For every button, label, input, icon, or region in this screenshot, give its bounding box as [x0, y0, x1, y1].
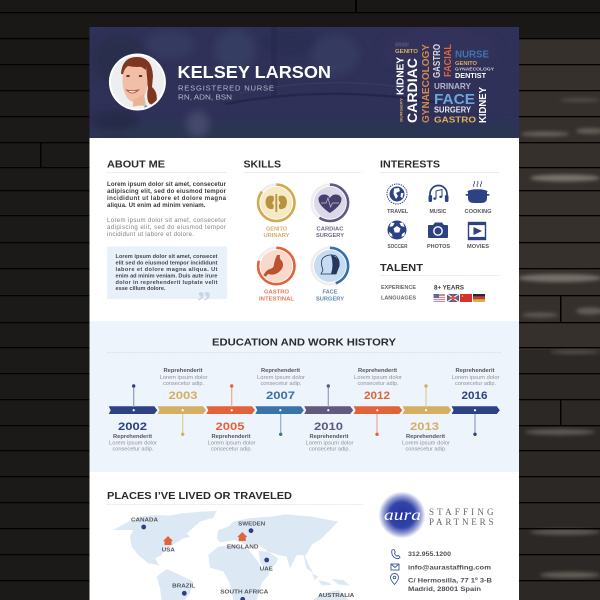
word cloud: GASTRO	[434, 114, 476, 124]
milestone: 2007: Lorem ipsum dolor	[257, 375, 305, 381]
panel: skills	[244, 160, 362, 302]
skill: gastro intestinal: GASTRO	[264, 290, 289, 296]
word cloud: URINARY	[395, 42, 409, 48]
word cloud: SURGERY	[434, 106, 472, 114]
milestone: 2012	[354, 368, 402, 436]
word cloud: KIDNEY	[396, 57, 406, 95]
icon: music: MUSIC	[430, 209, 447, 215]
bold paragraph: Lorem ipsum dolor sit amet, consecetur	[107, 181, 227, 188]
bold paragraph	[107, 181, 227, 209]
regular paragraph: incididunt ut labore et dolore.	[107, 231, 194, 238]
milestone: 2002: Reprehenderit	[113, 434, 152, 440]
skill: genito urinary: GENITO	[266, 226, 287, 232]
milestone: 2013: Reprehenderit	[406, 434, 445, 440]
milestone: 2002	[109, 384, 157, 452]
word cloud: FACIAL	[443, 44, 454, 77]
milestone: 2007	[257, 368, 305, 436]
milestone: 2003: Lorem ipsum dolor	[160, 375, 208, 381]
email address: info@aurastaffing.com	[408, 564, 491, 571]
milestone: 2002: consecetur adip.	[112, 446, 154, 452]
heading: about me: ABOUT ME	[107, 160, 165, 170]
quote callout: esse cillum dolore.	[116, 286, 166, 292]
heading: talent: TALENT	[380, 263, 424, 274]
milestone: 2012: 2012	[364, 390, 390, 402]
word cloud: GYNAECOLOGY	[455, 67, 494, 72]
icon: phone	[392, 550, 400, 559]
quote callout: Lorem ipsum dolor sit amet, consecet	[116, 254, 218, 260]
experience row	[381, 285, 464, 292]
address	[408, 578, 492, 593]
skill: cardiac surgery: SURGERY	[316, 233, 344, 239]
milestone: 2016	[452, 368, 500, 436]
word cloud: NURSE	[455, 48, 489, 60]
logo: aura staffing partners: PARTNERS	[429, 517, 494, 527]
word cloud: DENTIST	[455, 71, 486, 80]
contact details	[390, 550, 492, 593]
skill: gastro intestinal	[258, 248, 294, 302]
milestone: 2012: consecetur adip.	[358, 381, 398, 387]
skill: face surgery	[312, 248, 348, 302]
milestone: 2016: Reprehenderit	[456, 368, 495, 374]
icon: photos: PHOTOS	[427, 244, 450, 250]
milestone: 2010: 2010	[314, 421, 343, 433]
milestone: 2005	[208, 384, 256, 452]
milestone: 2005: Lorem ipsum dolor	[208, 440, 256, 446]
icon: travel: TRAVEL	[387, 209, 409, 215]
word cloud: GYNAECOLOGY	[421, 44, 432, 123]
quote callout: dolor in reprehenderit luptate velit	[116, 280, 218, 286]
milestone: 2005: consecetur adip.	[211, 446, 252, 452]
milestone: 2012: Lorem ipsum dolor	[354, 375, 402, 381]
timeline arrow bar	[109, 406, 500, 414]
languages row with flags: LANGUAGES	[381, 296, 416, 302]
quote callout: elit sed do eiusmod tempor incididunt	[116, 260, 218, 266]
icon: soccer: SOCCER	[388, 244, 408, 250]
bold paragraph: aliqua. Ut enim ad minim veniam.	[107, 202, 206, 209]
skill: genito urinary: URINARY	[264, 233, 290, 239]
panel: about me	[107, 160, 227, 318]
milestone: 2005: 2005	[216, 421, 245, 433]
milestone: 2013: 2013	[410, 421, 439, 433]
milestone: 2002: Lorem ipsum dolor	[109, 440, 157, 446]
name and title: RESGISTERED NURSE	[178, 84, 274, 92]
milestone: 2016: consecetur adip.	[455, 381, 496, 387]
map markers and labels: BRAZIL	[172, 584, 196, 590]
map markers and labels: SWEDEN	[238, 522, 265, 528]
map markers and labels: SOUTH AFRICA	[220, 589, 269, 595]
skill: face surgery: SURGERY	[316, 296, 344, 302]
milestone: 2010: Lorem ipsum dolor	[306, 440, 354, 446]
panel: places	[107, 491, 363, 600]
white resume sheet	[90, 27, 519, 600]
milestone: 2007: 2007	[266, 390, 295, 402]
map markers and labels: USA	[162, 548, 176, 554]
word cloud: URINARY	[434, 81, 471, 91]
milestone: 2013: consecetur adip.	[406, 446, 446, 452]
milestone: 2013	[402, 384, 450, 452]
milestone: 2012: Reprehenderit	[358, 368, 397, 374]
skill: face surgery: FACE	[322, 290, 338, 296]
heading: places: PLACES I’VE LIVED OR TRAVELED	[107, 491, 293, 502]
icon: cooking: COOKING	[464, 209, 492, 215]
milestone: 2005: Reprehenderit	[212, 434, 251, 440]
panel: talent	[380, 263, 499, 302]
word cloud: GENITO	[455, 61, 478, 67]
regular paragraph	[107, 217, 226, 238]
skill: cardiac surgery: CARDIAC	[316, 226, 344, 232]
icon: email	[391, 564, 399, 570]
panel: education and work history	[90, 321, 519, 472]
heading: interests: INTERESTS	[380, 159, 440, 170]
milestone: 2003: Reprehenderit	[164, 368, 203, 374]
milestone: 2010: consecetur adip.	[309, 446, 350, 452]
address: C/ Hermosilla, 77 1º 3-B	[408, 578, 492, 584]
heading: education: EDUCATION AND WORK HISTORY	[212, 337, 396, 348]
icon: location pin	[390, 574, 398, 584]
milestone: 2002: 2002	[118, 421, 147, 433]
experience row: EXPERIENCE	[381, 285, 416, 291]
milestone: 2003: consecetur adip.	[163, 381, 204, 387]
panel: header banner	[89, 26, 519, 142]
skill: genito urinary	[258, 185, 294, 239]
header photo backdrop	[91, 27, 440, 138]
heading: skills: SKILLS	[244, 160, 281, 170]
milestone: 2010: Reprehenderit	[310, 434, 349, 440]
word cloud: CARDIAC	[404, 58, 420, 123]
skill: cardiac surgery	[312, 185, 348, 239]
quote callout: ”	[197, 287, 211, 318]
panel: interests	[380, 159, 499, 250]
experience row: 8+ YEARS	[434, 285, 464, 292]
icon: movies: MOVIES	[467, 244, 489, 250]
world map	[113, 511, 350, 600]
map markers and labels: AUSTRALIA	[318, 593, 355, 599]
name and title: RN, ADN, BSN	[178, 92, 232, 102]
logo: aura staffing partners: STAFFING	[429, 507, 494, 517]
name and title: KELSEY LARSON	[178, 62, 331, 82]
skill: gastro intestinal: INTESTINAL	[259, 296, 294, 302]
regular paragraph: Lorem ipsum dolor sit amet, consecetur	[107, 217, 226, 224]
word cloud: KIDNEY	[478, 87, 489, 123]
milestone: 2003	[160, 368, 208, 436]
profile photo	[108, 54, 166, 110]
milestone: 2013: Lorem ipsum dolor	[402, 440, 450, 446]
word cloud: GASTRO	[432, 44, 443, 78]
milestone: 2016: 2016	[462, 390, 488, 402]
name and title	[178, 62, 331, 102]
word cloud	[395, 42, 494, 124]
bold paragraph: adipiscing elit, sed do eiusmod tempor	[107, 188, 227, 195]
word cloud: GENITO	[395, 49, 418, 55]
map markers and labels: ENGLAND	[227, 544, 258, 550]
bold paragraph: incididunt ut labore et dolore magna	[107, 195, 227, 202]
quote callout: enim ad minim veniam. Duis aute irure	[116, 273, 218, 279]
regular paragraph: adipiscing elit, sed do eiusmod tempor	[107, 224, 226, 231]
milestone: 2016: Lorem ipsum dolor	[452, 375, 500, 381]
milestone: 2007: consecetur adip.	[260, 381, 302, 387]
address: Madrid, 28001 Spain	[408, 586, 481, 593]
map markers and labels: UAE	[260, 566, 273, 572]
map markers and labels	[131, 518, 355, 600]
phone number: 312.955.1200	[408, 551, 451, 558]
milestone: 2003: 2003	[168, 390, 198, 402]
map markers and labels: CANADA	[131, 518, 159, 524]
quote callout: labore et dolore magna aliqua. Ut	[116, 267, 218, 273]
word cloud: SURGERY	[400, 97, 404, 122]
milestone: 2010	[306, 384, 354, 452]
quote callout	[107, 246, 227, 318]
logo: aura staffing partners: aura	[384, 507, 421, 524]
word cloud: FACE	[434, 91, 475, 108]
milestone: 2007: Reprehenderit	[261, 368, 300, 374]
logo: aura staffing partners	[378, 492, 494, 538]
